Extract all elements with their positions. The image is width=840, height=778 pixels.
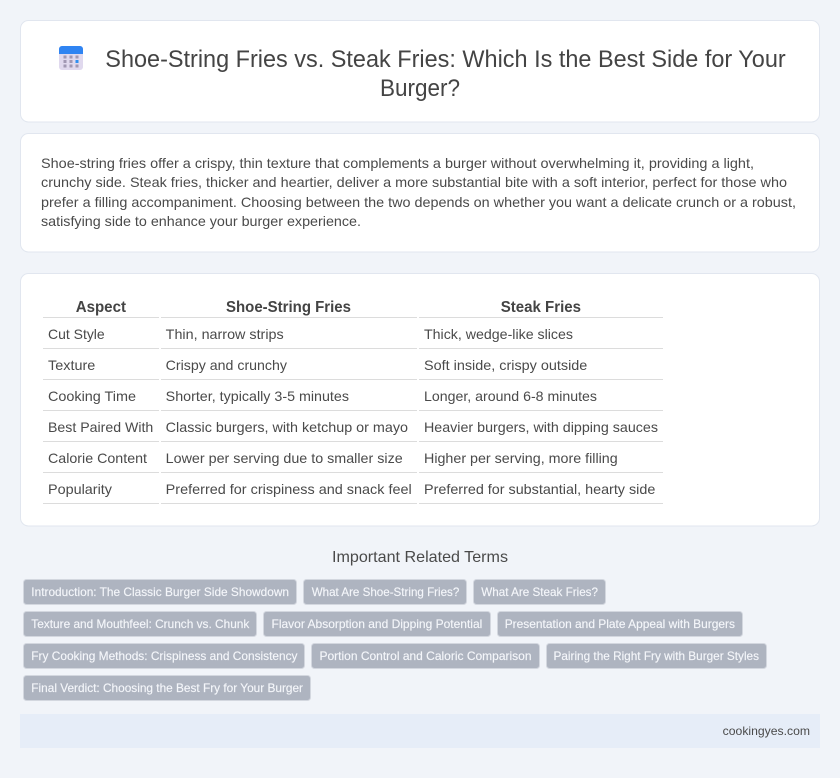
- tag: [312, 644, 540, 668]
- row: best paired with: Classic burgers, with ketchup or mayo: [166, 419, 408, 435]
- table header: [76, 299, 581, 316]
- tag: [474, 580, 606, 604]
- table header: Shoe-String Fries: [226, 299, 351, 316]
- tag: [264, 612, 490, 636]
- tag: Portion Control and Caloric Comparison: [320, 649, 532, 663]
- row: calorie content: Calorie Content: [48, 450, 147, 466]
- panel: introduction text: crunchy side. Steak fries, thicker and heartier, deliver a more substantial bite with a soft interior, perfect for those who: [41, 174, 787, 190]
- heading: important related terms: Important Related Terms: [332, 549, 508, 566]
- row: cut style: Cut Style: [48, 326, 105, 342]
- row: best paired with: Best Paired With: [48, 419, 153, 435]
- panel: introduction text: prefer a filling accompaniment. Choosing between the two depends on whether you want a delicate crunch or a robust,: [41, 194, 796, 210]
- tag: Final Verdict: Choosing the Best Fry for Your Burger: [31, 681, 303, 695]
- row: popularity: [48, 481, 656, 497]
- row: popularity: Popularity: [48, 481, 112, 497]
- tag: [24, 644, 304, 668]
- panel: title card: [20, 20, 820, 122]
- row: best paired with: [48, 419, 658, 435]
- tag: Presentation and Plate Appeal with Burgers: [505, 617, 735, 631]
- row: cooking time: [48, 388, 597, 404]
- footer: cookingyes.com: [723, 724, 810, 738]
- tag: [498, 612, 742, 636]
- tag: Pairing the Right Fry with Burger Styles: [554, 649, 759, 663]
- title: Burger?: [380, 75, 460, 102]
- panel: introduction text: satisfying side to enhance your burger experience.: [41, 213, 361, 229]
- row: cooking time: Longer, around 6-8 minutes: [424, 388, 597, 404]
- row: calorie content: Lower per serving due to smaller size: [166, 450, 403, 466]
- panel: introduction text: [20, 134, 820, 252]
- row: calorie content: [48, 450, 618, 466]
- icon: calendar: [59, 46, 83, 70]
- table header: Aspect: [76, 299, 127, 316]
- row: cut style: Thin, narrow strips: [166, 326, 284, 342]
- panel: comparison table: [20, 274, 820, 526]
- row: cooking time: Shorter, typically 3-5 minutes: [166, 388, 349, 404]
- tag: Flavor Absorption and Dipping Potential: [272, 617, 482, 631]
- row: cut style: Thick, wedge-like slices: [424, 326, 573, 342]
- row: popularity: Preferred for crispiness and snack feel: [166, 481, 412, 497]
- row: texture: Crispy and crunchy: [166, 357, 287, 373]
- row: texture: Soft inside, crispy outside: [424, 357, 588, 373]
- tag: Fry Cooking Methods: Crispiness and Consistency: [31, 649, 298, 663]
- tag: [24, 580, 296, 604]
- tag: What Are Shoe-String Fries?: [312, 585, 460, 599]
- row: popularity: Preferred for substantial, hearty side: [424, 481, 656, 497]
- tag: What Are Steak Fries?: [481, 585, 598, 599]
- row: calorie content: Higher per serving, more filling: [424, 450, 618, 466]
- footer: [20, 714, 820, 748]
- title: [105, 46, 786, 102]
- tag: Texture and Mouthfeel: Crunch vs. Chunk: [31, 617, 250, 631]
- table header: Steak Fries: [501, 299, 581, 316]
- title: Shoe-String Fries vs. Steak Fries: Which Is the Best Side for Your: [105, 46, 786, 73]
- row: texture: [48, 357, 588, 373]
- tag: [546, 644, 766, 668]
- tag: Introduction: The Classic Burger Side Showdown: [31, 585, 289, 599]
- tag: [24, 612, 256, 636]
- tag: [304, 580, 466, 604]
- panel: related term tags: [24, 580, 766, 700]
- row: cut style: [48, 326, 573, 342]
- row: texture: Texture: [48, 357, 96, 373]
- row: cooking time: Cooking Time: [48, 388, 136, 404]
- tag: [24, 676, 310, 700]
- row: best paired with: Heavier burgers, with dipping sauces: [424, 419, 658, 435]
- panel: introduction text: Shoe-string fries offer a crispy, thin texture that complements a burger without overwhelming it, providing a light,: [41, 155, 754, 171]
